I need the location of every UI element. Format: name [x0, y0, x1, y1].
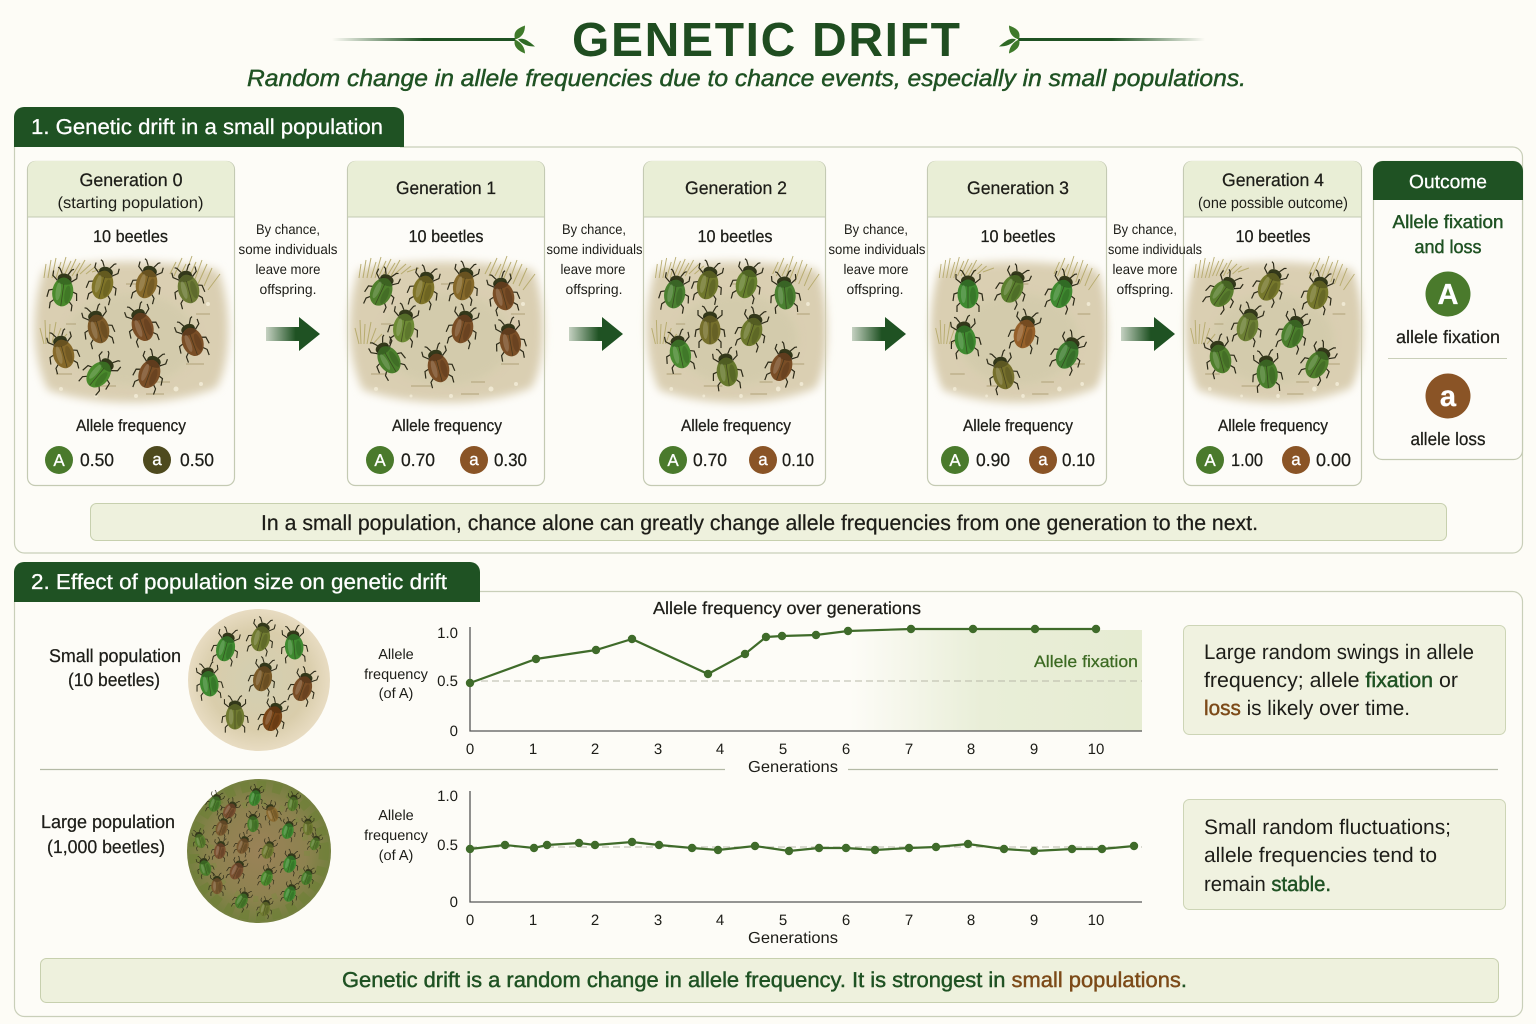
left ornament: [332, 26, 535, 54]
axes: [470, 791, 1142, 902]
allele frequencies: [941, 446, 1095, 474]
y axis label: (of A): [379, 686, 413, 702]
y axis label: frequency: [364, 828, 429, 844]
x ticks: 7: [905, 912, 913, 929]
fixation label: Allele fixation: [1034, 653, 1138, 671]
card: outcome: and loss: [1414, 236, 1482, 257]
y ticks: 0.5: [437, 837, 458, 854]
card: generation 1: Allele frequency: [392, 417, 503, 435]
card: generation 4: (one possible outcome): [1198, 195, 1348, 212]
allele frequencies: a: [1291, 450, 1301, 469]
callout: large population effect: Small random fluctuations;: [1204, 816, 1451, 839]
allele frequencies: 0.30: [494, 450, 527, 470]
y ticks: 0.5: [437, 673, 458, 690]
callout: summary: Genetic drift is a random change in allele frequency. It is strongest in small populations.: [342, 968, 1187, 992]
arrow text 2: By chance,: [562, 221, 626, 237]
title block: [247, 14, 1246, 91]
card: generation 1: Generation 1: [396, 178, 496, 198]
data line: [470, 842, 1134, 851]
x ticks: 3: [654, 912, 662, 929]
x ticks: 7: [905, 741, 913, 758]
callout: summary: [40, 958, 1498, 1002]
subtitle: Random change in allele frequencies due to chance events, especially in small populations.: [247, 65, 1246, 91]
panel 2 frame: [14, 592, 1522, 1016]
card: generation 0: 10 beetles: [93, 227, 168, 246]
allele frequencies: A: [374, 451, 386, 470]
icon: allele a: [1426, 374, 1470, 418]
arrow text 1: leave more: [256, 261, 321, 277]
x ticks: 10: [1088, 741, 1104, 758]
fixation shading: [850, 630, 1142, 731]
small population label: Small population: [49, 645, 181, 666]
y ticks: 1.0: [437, 788, 458, 805]
x ticks: 9: [1030, 741, 1038, 758]
card: outcome: [1373, 161, 1523, 460]
allele frequencies: 0.00: [1316, 450, 1351, 470]
title: GENETIC DRIFT: [572, 14, 960, 67]
large population label: Large population: [41, 811, 175, 832]
allele frequencies: 0.90: [976, 450, 1010, 470]
card: generation 3: Generation 3: [967, 178, 1069, 198]
x ticks: 2: [591, 741, 599, 758]
x ticks: 5: [779, 741, 787, 758]
beetle scene: [647, 256, 827, 402]
panel: section 1: [14, 107, 1523, 553]
allele frequencies: [659, 446, 814, 474]
allele frequencies: 0.70: [401, 450, 435, 470]
x ticks: 4: [716, 741, 724, 758]
right ornament: [999, 26, 1205, 54]
arrow text 3: offspring.: [846, 281, 904, 297]
card: generation 3: Allele frequency: [963, 417, 1074, 435]
x ticks: 9: [1030, 912, 1038, 929]
x ticks: 3: [654, 741, 662, 758]
arrow 2: [569, 317, 623, 351]
data line: [470, 629, 1096, 683]
x ticks: 0: [466, 912, 474, 929]
x ticks: 8: [967, 912, 975, 929]
y axis label: Allele: [378, 647, 414, 663]
y axis label: (of A): [379, 848, 413, 864]
callout: small population effect: [1184, 626, 1506, 734]
card: generation 4: Generation 4: [1222, 170, 1324, 190]
x ticks: 8: [967, 741, 975, 758]
allele frequencies: 0.10: [1062, 450, 1095, 470]
allele frequencies: A: [667, 451, 679, 470]
card: generation 3: [928, 161, 1107, 486]
section 1 heading: 1. Genetic drift in a small population: [31, 115, 383, 139]
allele frequencies: 0.70: [693, 450, 727, 470]
y axis label: Allele: [378, 808, 414, 824]
large population label: (1,000 beetles): [47, 836, 165, 857]
allele frequencies: 1.00: [1231, 450, 1263, 470]
arrow text 4: leave more: [1112, 261, 1178, 277]
arrow text 4: some individuals: [1108, 241, 1202, 257]
allele frequencies: [366, 446, 527, 474]
card: generation 2: Allele frequency: [681, 417, 792, 435]
x ticks: 6: [842, 912, 850, 929]
icon: allele A: [1426, 272, 1470, 316]
arrow text 2: offspring.: [566, 281, 622, 297]
allele frequencies: A: [53, 451, 65, 470]
allele frequencies: [45, 446, 214, 474]
allele frequencies: 0.10: [782, 450, 814, 470]
callout: small population chance: In a small population, chance alone can greatly change allele frequencies from one generation to the next.: [261, 511, 1258, 535]
arrow 4: [1121, 317, 1175, 351]
data points: [466, 625, 1100, 687]
callout: small population chance: [90, 504, 1446, 540]
beetle scene: [35, 256, 228, 402]
arrow text 1: offspring.: [260, 281, 316, 297]
card: outcome: Outcome: [1409, 172, 1487, 193]
card: generation 4: [1184, 161, 1362, 486]
x ticks: 5: [779, 912, 787, 929]
x ticks: 0: [466, 741, 474, 758]
card: generation 0: [28, 161, 234, 486]
card: generation 0: Generation 0: [80, 170, 182, 190]
y ticks: 1.0: [437, 625, 458, 642]
x ticks: 6: [842, 741, 850, 758]
allele frequencies: a: [1038, 450, 1048, 469]
y ticks: 0: [450, 894, 458, 911]
section 2 heading: 2. Effect of population size on genetic drift: [31, 570, 447, 594]
x ticks: 10: [1088, 912, 1104, 929]
arrow text 3: leave more: [844, 261, 909, 277]
card: generation 1: 10 beetles: [408, 227, 484, 246]
beetle scene: [931, 256, 1107, 402]
allele frequencies: A: [949, 451, 961, 470]
divider with label: Generations: [748, 759, 838, 776]
card: generation 2: [644, 161, 827, 486]
callout: small population effect: Large random swings in allele: [1204, 641, 1474, 664]
panel: section 2: [14, 562, 1522, 1016]
arrow text 2: some individuals: [546, 241, 642, 257]
arrow text 4: By chance,: [1113, 221, 1177, 237]
x ticks: 1: [529, 741, 537, 758]
card: generation 1: [348, 161, 544, 486]
large population chart: [364, 788, 1142, 947]
allele frequencies: a: [152, 450, 162, 469]
small population label: (10 beetles): [68, 669, 160, 690]
callout: small population effect: frequency; allele fixation or: [1204, 669, 1458, 692]
card: generation 0: (starting population): [58, 195, 204, 212]
beetle scene: [1186, 256, 1362, 402]
x axis label: Generations: [748, 930, 838, 947]
chart title: Allele frequency over generations: [653, 598, 921, 618]
x ticks: 1: [529, 912, 537, 929]
card: generation 2: 10 beetles: [698, 227, 772, 246]
card: outcome: allele fixation: [1396, 327, 1500, 347]
card: outcome: allele loss: [1410, 429, 1486, 449]
callout: large population effect: remain stable.: [1204, 873, 1331, 896]
small population chart: [364, 598, 1142, 758]
panel 1 frame: [14, 140, 1522, 553]
section 1 heading: [14, 107, 404, 147]
callout: small population effect: loss is likely over time.: [1204, 697, 1410, 720]
arrow text 3: By chance,: [844, 221, 908, 237]
large population image: [187, 779, 331, 923]
allele frequencies: [1196, 446, 1351, 474]
beetle scene: [350, 256, 543, 402]
icon: allele a: a: [1440, 381, 1457, 413]
arrow text 3: some individuals: [828, 241, 926, 257]
callout: large population effect: [1184, 800, 1506, 910]
arrow text 1: some individuals: [238, 241, 338, 257]
card: generation 4: Allele frequency: [1218, 417, 1329, 435]
card: outcome: Allele fixation: [1392, 211, 1504, 232]
card: generation 3: 10 beetles: [980, 227, 1056, 246]
arrow 1: [266, 317, 320, 351]
card: generation 2: Generation 2: [685, 178, 787, 198]
y axis label: frequency: [364, 667, 429, 683]
axes: [470, 627, 1142, 731]
icon: allele A: A: [1438, 279, 1459, 311]
x ticks: 2: [591, 912, 599, 929]
allele frequencies: 0.50: [80, 450, 114, 470]
card: generation 0: Allele frequency: [76, 417, 187, 435]
x ticks: 4: [716, 912, 724, 929]
section 2 heading: [14, 562, 480, 602]
small population image: [188, 609, 330, 751]
allele frequencies: a: [469, 450, 479, 469]
arrow 3: [852, 317, 906, 351]
data points: [466, 838, 1138, 855]
arrow text 4: offspring.: [1116, 281, 1174, 297]
y ticks: 0: [450, 723, 458, 740]
card: generation 4: 10 beetles: [1236, 227, 1310, 246]
callout: large population effect: allele frequencies tend to: [1204, 844, 1437, 867]
arrow text 1: By chance,: [256, 221, 320, 237]
allele frequencies: 0.50: [180, 450, 214, 470]
arrow text 2: leave more: [560, 261, 626, 277]
allele frequencies: a: [758, 450, 768, 469]
allele frequencies: A: [1204, 451, 1216, 470]
